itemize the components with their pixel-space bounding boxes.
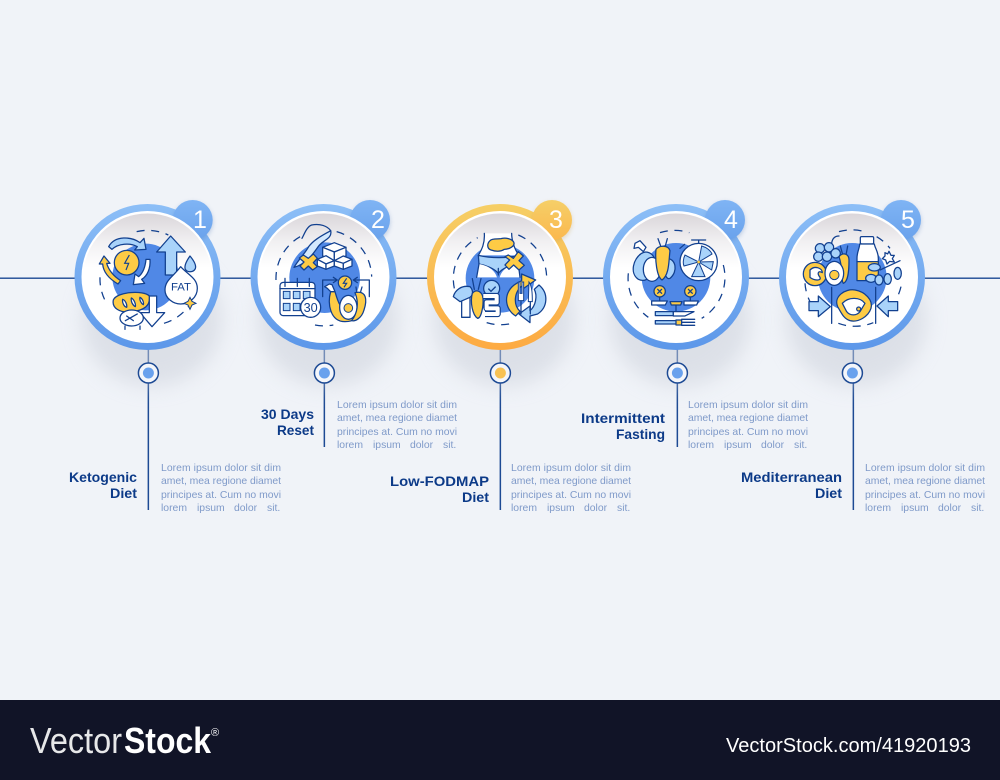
plate 3	[434, 211, 566, 343]
text block 1: lorem	[161, 503, 187, 514]
ring 5	[779, 204, 925, 350]
icon: ketosis fat and bread	[99, 230, 197, 329]
text block 1: Lorem ipsum dolor sit dim	[161, 463, 281, 474]
title 4	[581, 410, 665, 442]
text block 4: lorem	[688, 440, 714, 451]
text block 2	[337, 400, 457, 451]
connector dot 5	[842, 363, 862, 383]
title 1	[69, 469, 137, 501]
number badge 2	[350, 200, 390, 242]
number 1: 1	[193, 206, 207, 234]
ring 2	[250, 204, 396, 350]
connector dot 3	[490, 363, 510, 383]
connector dot 2	[314, 363, 334, 383]
text block 1: ipsum	[197, 503, 225, 514]
text block 3: principes at. Cum no movi	[511, 490, 631, 501]
text block 3: amet, mea regione diamet	[511, 476, 631, 487]
text block 3	[511, 463, 631, 514]
text block 2: lorem	[337, 440, 363, 451]
number badge 4	[705, 200, 745, 242]
title 2	[261, 406, 314, 438]
panel: step 2 30 Days Reset	[250, 200, 457, 451]
text block 3: ipsum	[547, 503, 575, 514]
title 2: Reset	[277, 422, 314, 438]
connector dot 1	[138, 363, 158, 383]
number 3: 3	[549, 206, 563, 234]
text block 1	[161, 463, 281, 514]
footer logo: ®	[211, 727, 219, 739]
text block 3: sit.	[617, 503, 630, 514]
icon: sugar cubes, calendar and food: 30	[304, 301, 318, 315]
text block 5: Lorem ipsum dolor sit dim	[865, 463, 985, 474]
text block 4: Lorem ipsum dolor sit dim	[688, 400, 808, 411]
icon: sugar cubes, calendar and food	[276, 224, 372, 326]
title 5	[741, 469, 842, 501]
title 1: Ketogenic	[69, 469, 137, 485]
footer logo: Vector	[30, 720, 122, 761]
text block 2: ipsum	[373, 440, 401, 451]
title 4: Intermittent	[581, 410, 665, 426]
panel: step 3 Low-FODMAP Diet	[390, 200, 631, 514]
number 2: 2	[371, 206, 385, 234]
text block 1: sit.	[267, 503, 280, 514]
plate 4	[610, 211, 742, 343]
plate 1	[82, 211, 214, 343]
icon: gut, carrot and plate	[453, 233, 547, 325]
text block 2: principes at. Cum no movi	[337, 427, 457, 438]
panel: step 4 Intermittent Fasting	[581, 200, 808, 451]
panel: step 1 Ketogenic Diet	[69, 200, 281, 514]
title 5: Mediterranean	[741, 469, 842, 485]
title 4: Fasting	[616, 426, 665, 442]
icon: ketosis fat and bread: FAT	[171, 282, 191, 294]
title 3	[390, 473, 489, 505]
plate 5	[786, 211, 918, 343]
ring 4	[603, 204, 749, 350]
icon: food, timer and cutlery	[628, 230, 725, 325]
title 3: Diet	[462, 489, 489, 505]
title 3: Low-FODMAP	[390, 473, 489, 489]
footer logo	[30, 720, 219, 761]
text block 3: lorem	[511, 503, 537, 514]
text block 5: sit.	[971, 503, 984, 514]
number 4: 4	[724, 206, 738, 234]
text block 2: amet, mea regione diamet	[337, 413, 457, 424]
text block 2: Lorem ipsum dolor sit dim	[337, 400, 457, 411]
text block 4: amet, mea regione diamet	[688, 413, 808, 424]
horizontal timeline	[0, 278, 1000, 279]
text block 4: principes at. Cum no movi	[688, 427, 808, 438]
text block 4: dolor	[761, 440, 785, 451]
text block 2: sit.	[443, 440, 456, 451]
title 2: 30 Days	[261, 406, 314, 422]
text block 1: amet, mea regione diamet	[161, 476, 281, 487]
ring 1	[74, 204, 220, 350]
text block 3: Lorem ipsum dolor sit dim	[511, 463, 631, 474]
text block 4	[688, 400, 808, 451]
footer bar	[0, 700, 1000, 780]
text block 4: sit.	[794, 440, 807, 451]
ring 3	[427, 204, 573, 350]
text block 5: principes at. Cum no movi	[865, 490, 985, 501]
plate 2	[258, 211, 390, 343]
number badge 3	[532, 200, 572, 242]
icon: mediterranean foods	[803, 230, 901, 326]
number badge 1	[173, 200, 213, 242]
panel: step 5 Mediterranean Diet	[741, 200, 985, 514]
number badge 5	[881, 200, 921, 242]
text block 5: amet, mea regione diamet	[865, 476, 985, 487]
text block 5	[865, 463, 985, 514]
text block 5: lorem	[865, 503, 891, 514]
connector dot 4	[667, 363, 687, 383]
text block 1: principes at. Cum no movi	[161, 490, 281, 501]
text block 2: dolor	[410, 440, 434, 451]
text block 5: dolor	[938, 503, 962, 514]
footer logo: Stock	[124, 720, 212, 761]
title 5: Diet	[815, 485, 842, 501]
title 1: Diet	[110, 485, 137, 501]
number 5: 5	[901, 206, 915, 234]
text block 1: dolor	[234, 503, 258, 514]
text block 5: ipsum	[901, 503, 929, 514]
text block 3: dolor	[584, 503, 608, 514]
footer id: VectorStock.com/41920193	[726, 735, 971, 757]
text block 4: ipsum	[724, 440, 752, 451]
